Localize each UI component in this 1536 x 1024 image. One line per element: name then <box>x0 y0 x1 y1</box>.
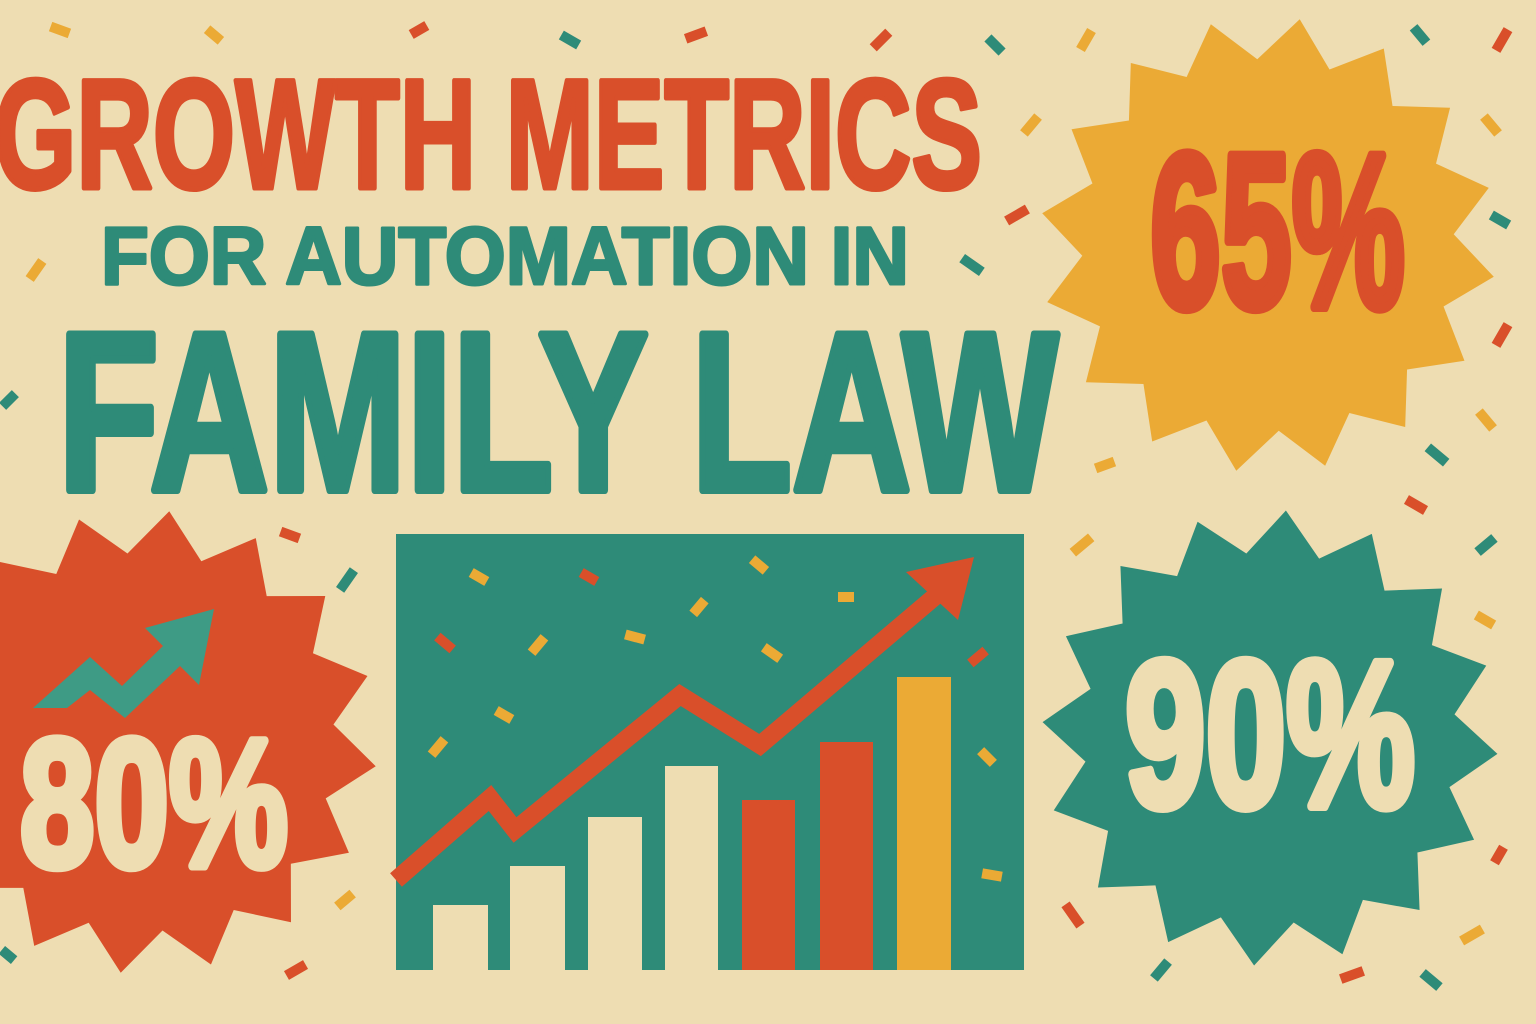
chart panel <box>396 534 1024 970</box>
title: growth metrics: GROWTH METRICS <box>0 48 982 222</box>
subtitle: for automation in: FOR AUTOMATION IN <box>101 211 909 302</box>
bars <box>433 677 951 970</box>
badge: 65% <box>1010 0 1526 503</box>
badge: 90%: 90% <box>1125 619 1415 851</box>
trend arrow <box>396 557 974 880</box>
badge: 90% <box>1027 495 1513 981</box>
icon: teal growth arrow <box>33 609 214 718</box>
badge: 80%: 80% <box>20 701 288 905</box>
chart confetti <box>428 555 1003 882</box>
badge: 80% <box>0 487 400 997</box>
title: family law: FAMILY LAW <box>58 285 1058 538</box>
